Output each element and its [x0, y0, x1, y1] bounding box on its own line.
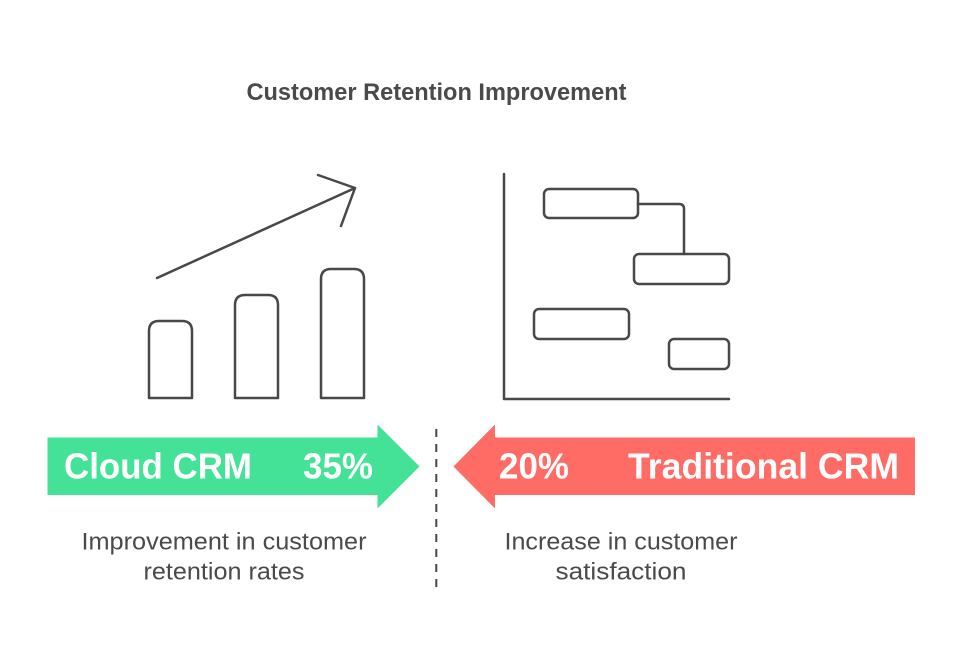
arrow: Traditional CRM 20%: Traditional CRM — [628, 446, 899, 486]
icon: scattered process chart — [504, 174, 729, 399]
text: Traditional CRM description: satisfaction — [556, 558, 686, 586]
title: Customer Retention Improvement — [246, 79, 627, 106]
text: Cloud CRM description: Improvement in customer — [82, 528, 367, 556]
arrow: Traditional CRM 20%: 20% — [499, 446, 569, 486]
icon: rising bar chart with arrow — [149, 175, 364, 398]
arrow: Cloud CRM 35%: 35% — [303, 446, 373, 486]
arrow: Traditional CRM 20% — [454, 424, 915, 508]
text: Cloud CRM description: retention rates — [144, 558, 304, 586]
center divider — [435, 429, 437, 587]
text: Cloud CRM description — [82, 528, 367, 586]
arrow: Cloud CRM 35% — [48, 424, 420, 508]
text: Traditional CRM description — [504, 528, 738, 586]
text: Traditional CRM description: Increase in customer — [504, 528, 738, 556]
arrow: Cloud CRM 35%: Cloud CRM — [64, 446, 252, 486]
